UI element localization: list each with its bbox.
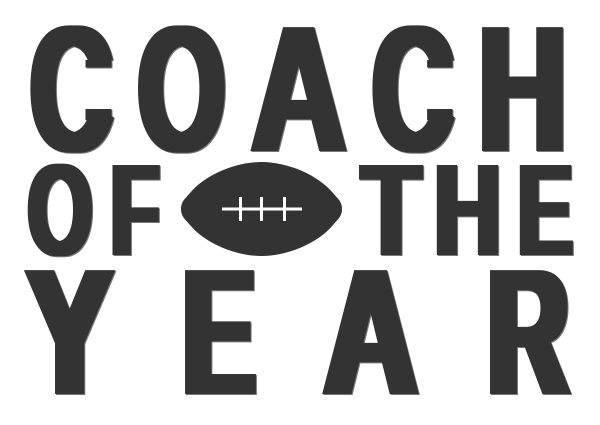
heading word: OF: O — [28, 138, 92, 284]
heading line: YEAR — [27, 231, 568, 425]
heading word: THE: T — [361, 138, 421, 283]
heading word: THE: E — [518, 138, 573, 284]
icon: football — [181, 162, 342, 256]
heading word: THE: H — [434, 137, 501, 284]
heading word: THE — [361, 137, 573, 284]
heading word: OF: F — [111, 136, 159, 283]
heading line: COACH — [30, 0, 567, 190]
heading word: OF — [28, 136, 159, 284]
